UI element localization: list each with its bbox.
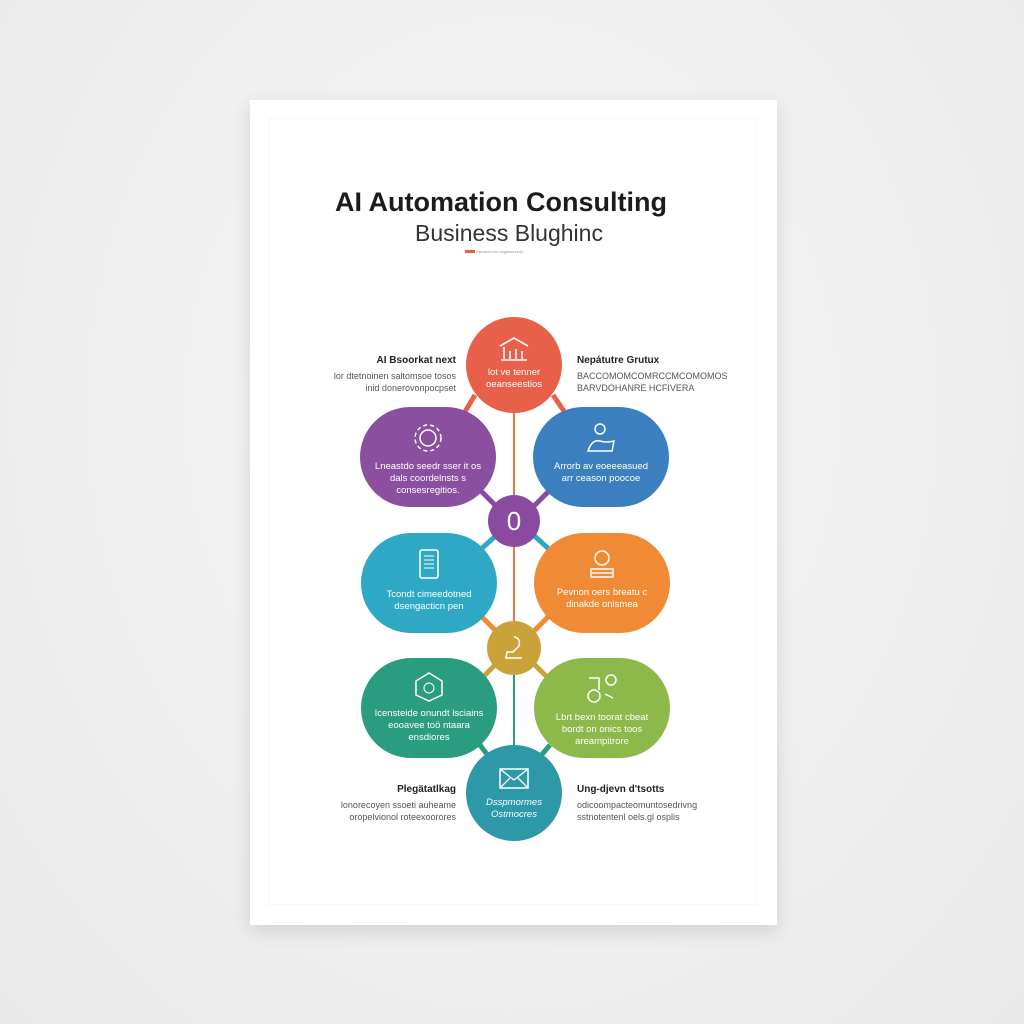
label: top left: lor dtetnoinen saltomsoe tosos xyxy=(334,371,456,381)
label: bottom right: odicoompacteomuntosedrivng xyxy=(577,800,697,810)
label: top left: AI Bsoorkat next xyxy=(377,355,456,366)
pill: purple: dals coordelnsts s xyxy=(390,473,466,484)
label: top right: Nepátutre Grutux xyxy=(577,355,659,366)
pill: purple xyxy=(360,407,496,507)
circle: bottom: Ostmocres xyxy=(491,809,537,820)
subtitle: Business Blughinc xyxy=(415,220,603,246)
circle: bottom xyxy=(466,745,562,841)
circle: top: oeanseestios xyxy=(486,379,542,390)
label: bottom left: Plegätatlkag xyxy=(397,784,456,795)
pill: green: eooavee toö ntaara xyxy=(388,720,470,731)
pill: orange xyxy=(534,533,670,633)
circle: top xyxy=(466,317,562,413)
tagline: usbrachronn wqgeacreeds xyxy=(476,249,523,254)
pill: teal xyxy=(361,533,497,633)
frame xyxy=(250,100,777,925)
pill: purple: Lneastdo seedr sser it os xyxy=(375,461,481,472)
pill: blue xyxy=(533,407,669,507)
pill: lime xyxy=(534,658,670,758)
circle: gold hub xyxy=(487,621,541,675)
circle: purple hub: 0 xyxy=(507,506,521,536)
label: top right: BARVDOHANRE HCFIVERA xyxy=(577,383,694,393)
label: top right xyxy=(577,355,728,393)
label: bottom left: oropelvionol roteexoorores xyxy=(349,812,456,822)
circle: purple hub xyxy=(488,495,540,547)
pill: orange: Pevnon oers breatu c xyxy=(557,587,647,598)
label: bottom left: lonorecoyen ssoeti auheame xyxy=(341,800,456,810)
pill: green: Icensteide onundt lsciains xyxy=(375,708,483,719)
pill: lime: bordt on onics toos xyxy=(562,724,642,735)
pill: orange: dinakde onismea xyxy=(566,599,638,610)
label: bottom left xyxy=(341,784,456,822)
pill: teal: Tcondt cimeedotned xyxy=(386,589,472,600)
pill: purple: consesregitios. xyxy=(396,485,460,496)
circle: bottom: Dsspmormes xyxy=(486,797,542,808)
pill: green xyxy=(361,658,497,758)
label: bottom right: Ung-djevn d'tsotts xyxy=(577,784,664,795)
pill: lime: areampitrore xyxy=(575,736,629,747)
pill: lime: Lbrt bexn toorat cbeat xyxy=(556,712,648,723)
label: top left xyxy=(334,355,456,393)
pill: green: ensdiores xyxy=(408,732,450,743)
title: AI Automation Consulting xyxy=(335,187,667,217)
circle: top: lot ve tenner xyxy=(488,367,540,378)
pill: teal: dsengacticn pen xyxy=(394,601,464,612)
label: top left: inid donerovonpocpset xyxy=(365,383,456,393)
label: bottom right: sstnotentenl oels.gl osplis xyxy=(577,812,680,822)
pill: blue: Arrorb av eoeeeasued xyxy=(554,461,648,472)
label: top right: BACCOMOMCOMRCCMCOMOMOS xyxy=(577,371,728,381)
pill: blue: arr ceason poocoe xyxy=(562,473,640,484)
label: bottom right xyxy=(577,784,697,822)
